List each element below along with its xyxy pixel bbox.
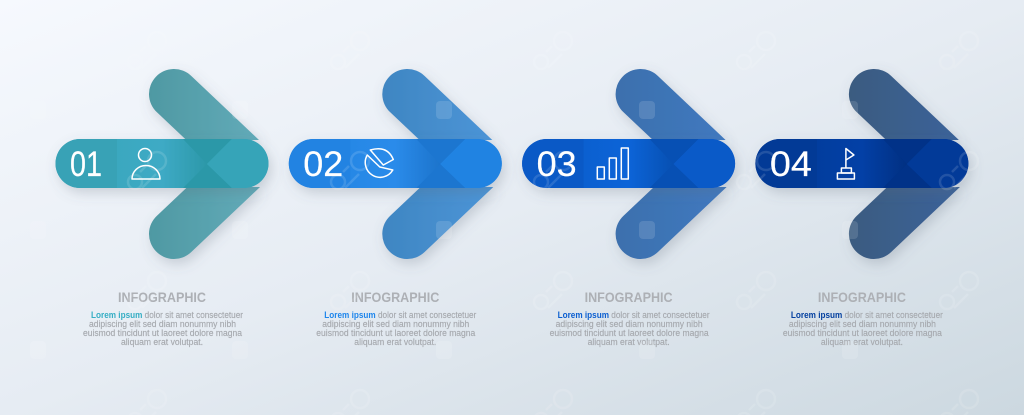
body text 02: Lorem ipsum dolor sit amet consectetuer <box>324 310 476 320</box>
body text 03 <box>550 310 710 347</box>
body text 02: adipiscing elit sed diam nonummy nibh <box>322 319 469 329</box>
icon: bar chart <box>597 148 628 179</box>
arrow step 02 <box>289 94 502 347</box>
chevron arms 02 <box>407 94 481 234</box>
body text 01: Lorem ipsum dolor sit amet consectetuer <box>91 310 243 320</box>
pill bar 03 <box>522 139 735 188</box>
body text 04: euismod tincidunt ut laoreet dolore magna <box>783 328 942 338</box>
arrow step 04 <box>755 94 968 347</box>
body text 03: adipiscing elit sed diam nonummy nibh <box>556 319 703 329</box>
chevron arms 03 <box>641 94 715 234</box>
body text 02: euismod tincidunt ut laoreet dolore magna <box>316 328 475 338</box>
pill bar 01 <box>56 139 268 188</box>
body text 02: aliquam erat volutpat. <box>354 337 436 347</box>
body text 01: adipiscing elit sed diam nonummy nibh <box>89 319 236 329</box>
body text 04: Lorem ipsum dolor sit amet consectetuer <box>791 310 943 320</box>
chevron arms 01 <box>174 94 248 234</box>
number 02: 02 <box>303 145 343 184</box>
body text 01: euismod tincidunt ut laoreet dolore magna <box>83 328 242 338</box>
icon: person <box>132 148 160 179</box>
pill bar 04 <box>755 139 968 188</box>
body text 04: adipiscing elit sed diam nonummy nibh <box>789 319 936 329</box>
heading 02: INFOGRAPHIC <box>351 289 439 305</box>
body text 03: Lorem ipsum dolor sit amet consectetuer <box>558 310 710 320</box>
pill bar 02 <box>289 139 502 188</box>
chevron arms 04 <box>874 94 948 234</box>
body text 02 <box>316 310 476 347</box>
heading 03: INFOGRAPHIC <box>585 289 673 305</box>
arrow step 01 <box>56 94 268 347</box>
body text 03: aliquam erat volutpat. <box>588 337 670 347</box>
icon: flag on podium <box>837 148 854 179</box>
number 03: 03 <box>537 145 577 184</box>
number 04: 04 <box>770 145 812 184</box>
arrow step 03 <box>522 94 735 347</box>
icon: pie chart <box>365 149 393 177</box>
body text 04 <box>783 310 943 347</box>
number 01: 01 <box>70 145 102 184</box>
body text 01 <box>83 310 243 347</box>
heading 01: INFOGRAPHIC <box>118 289 206 305</box>
heading 04: INFOGRAPHIC <box>818 289 906 305</box>
body text 03: euismod tincidunt ut laoreet dolore magna <box>550 328 709 338</box>
body text 01: aliquam erat volutpat. <box>121 337 203 347</box>
body text 04: aliquam erat volutpat. <box>821 337 903 347</box>
